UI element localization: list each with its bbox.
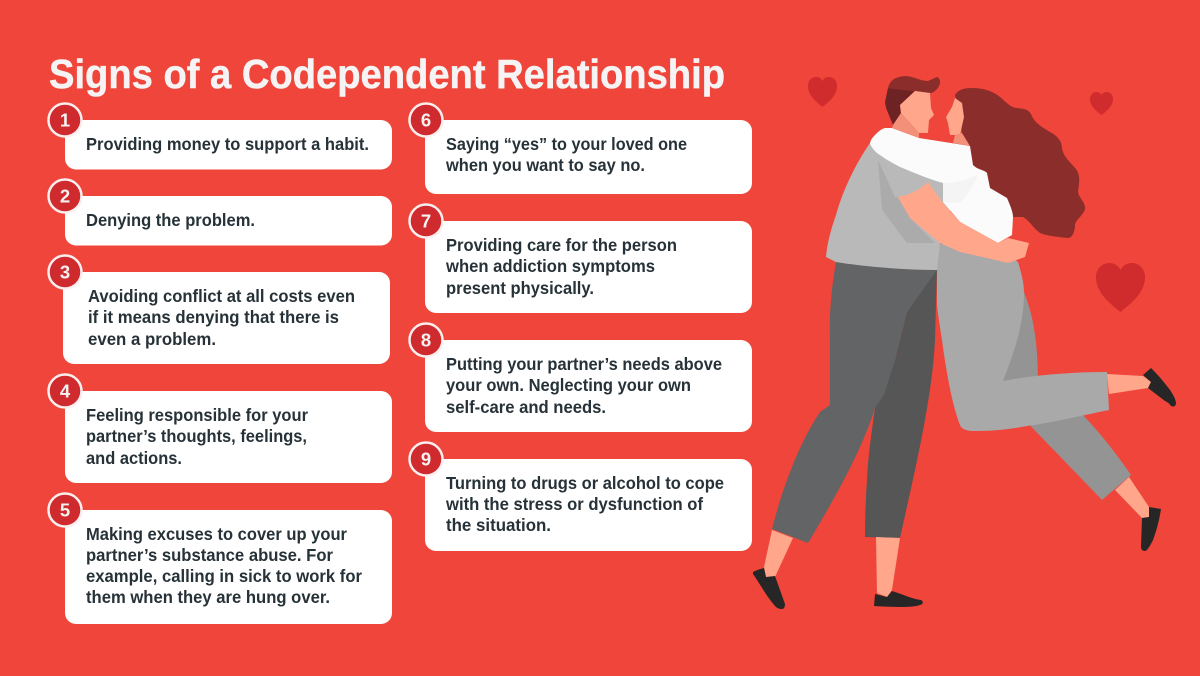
- card 9: [425, 459, 752, 551]
- item 2: [48, 180, 392, 246]
- woman's neck: [953, 133, 970, 146]
- badge 4: 4: [60, 380, 71, 402]
- text 9: [445, 473, 724, 535]
- text 3: Avoiding conflict at all costs even: [88, 286, 355, 306]
- man's back shoe: [874, 591, 923, 607]
- man's neck: [892, 113, 919, 138]
- badge 6: 6: [421, 110, 431, 130]
- text 5: them when they are hung over.: [86, 587, 330, 607]
- card 4: [65, 391, 392, 483]
- man's front shoe: [753, 568, 785, 609]
- text 8: self-care and needs.: [446, 397, 606, 417]
- item 9: [410, 442, 752, 551]
- badge 9: 9: [421, 448, 431, 470]
- badge 3: 3: [60, 262, 70, 282]
- text 4: Feeling responsible for your: [86, 405, 308, 425]
- text 5: Making excuses to cover up your: [86, 524, 347, 544]
- item 8: [410, 324, 752, 432]
- text 5: [86, 524, 362, 607]
- man's back leg: [865, 268, 937, 538]
- man's face: [900, 91, 934, 133]
- text 4: partner’s thoughts, feelings,: [86, 426, 307, 446]
- text 9: the situation.: [446, 515, 551, 535]
- woman's trousers: [937, 243, 1109, 431]
- text 6: Saying “yes” to your loved one: [446, 134, 687, 154]
- text 1: Providing money to support a habit.: [86, 134, 369, 154]
- text 8: your own. Neglecting your own: [446, 375, 691, 395]
- text 7: present physically.: [446, 278, 594, 298]
- man's top hair: [888, 76, 940, 93]
- text 9: with the stress or dysfunction of: [445, 494, 703, 514]
- card 7: [425, 221, 752, 313]
- badge 7: [410, 204, 442, 238]
- text 5: example, calling in sick to work for: [86, 566, 362, 586]
- badge 8: [410, 324, 442, 356]
- woman's front shoe: [1143, 368, 1176, 407]
- card 3: [63, 272, 390, 364]
- man's dark hair: [885, 88, 915, 125]
- item 5: [48, 494, 392, 624]
- icon: heart top left: [808, 77, 837, 107]
- illustration: hugging couple: [753, 76, 1176, 609]
- card 6: [425, 120, 752, 194]
- man's front leg skin: [764, 530, 793, 577]
- text 7: [445, 235, 677, 298]
- text 3: even a problem.: [88, 329, 216, 349]
- woman's back leg: [995, 280, 1131, 500]
- text 3: [88, 286, 355, 349]
- title: Signs of a Codependent Relationship: [49, 51, 725, 97]
- card 1: [65, 120, 392, 170]
- woman's hair: [955, 88, 1085, 238]
- badge 9: [410, 442, 442, 476]
- badge 6: [410, 104, 442, 136]
- text 3: if it means denying that there is: [88, 307, 339, 327]
- text 6: when you want to say no.: [445, 155, 645, 175]
- item 3: [48, 256, 390, 364]
- text 8: Putting your partner’s needs above: [446, 354, 722, 374]
- card 5: [65, 510, 392, 624]
- man's shirt: [826, 143, 950, 270]
- icon: heart top right: [1090, 92, 1113, 115]
- badge 2: [48, 180, 82, 212]
- text 7: Providing care for the person: [446, 235, 677, 255]
- text 4: and actions.: [86, 448, 182, 468]
- text 8: [446, 354, 722, 417]
- item 4: [48, 374, 392, 483]
- woman's white top: [870, 128, 1013, 243]
- badge 4: [48, 374, 82, 408]
- text 6: [445, 134, 687, 175]
- item 1: [48, 104, 392, 170]
- woman's front leg skin: [1107, 374, 1151, 394]
- woman's back leg skin: [1115, 477, 1149, 518]
- man's shirt fold: [878, 160, 935, 243]
- woman's face: [946, 98, 964, 135]
- white top shading: [943, 174, 978, 203]
- card 2: [65, 196, 392, 246]
- woman's back shoe: [1141, 507, 1161, 551]
- icon: heart right: [1096, 263, 1145, 312]
- man's hugging arm: [898, 182, 1029, 263]
- badge 5: 5: [60, 500, 70, 520]
- man's front leg: [772, 262, 937, 543]
- badge 1: 1: [60, 110, 70, 130]
- badge 7: 7: [421, 210, 431, 232]
- card 8: [425, 340, 752, 432]
- text 9: Turning to drugs or alcohol to cope: [446, 473, 724, 493]
- badge 1: [48, 104, 82, 136]
- badge 3: [48, 256, 82, 288]
- text 2: Denying the problem.: [86, 210, 255, 230]
- item 6: [410, 104, 752, 194]
- text 7: when addiction symptoms: [445, 256, 655, 276]
- badge 2: 2: [60, 186, 70, 206]
- badge 8: 8: [421, 330, 431, 350]
- text 5: partner’s substance abuse. For: [86, 545, 333, 565]
- text 4: [86, 405, 308, 468]
- item 7: [410, 204, 752, 313]
- badge 5: [48, 494, 82, 526]
- man's back leg skin: [876, 537, 900, 597]
